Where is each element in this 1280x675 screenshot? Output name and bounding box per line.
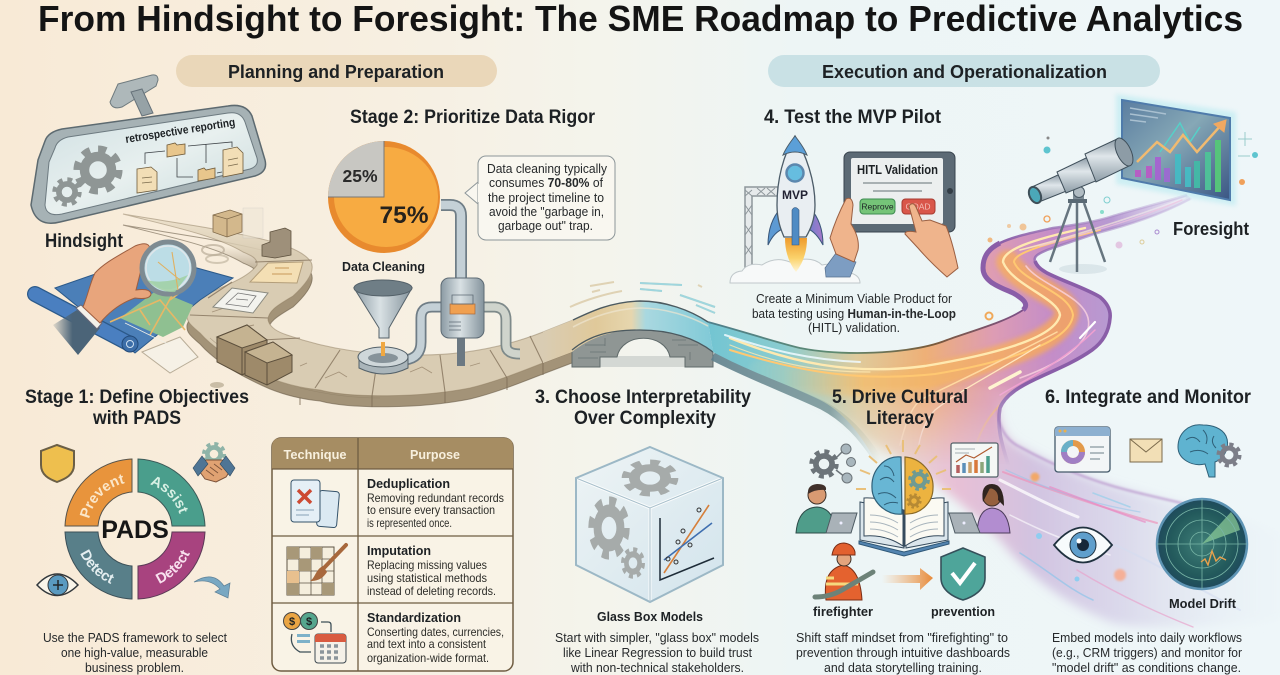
bridge deck <box>543 301 713 363</box>
gantry <box>745 187 778 270</box>
tripod <box>1059 264 1107 274</box>
caption: monitor <box>1052 631 1242 675</box>
basin <box>359 357 408 374</box>
row: deduplication: is represented once. <box>367 516 452 530</box>
icon: tablet HITL validation: Reprove <box>861 202 894 212</box>
caption: MVP: Create a Minimum Viable Product for <box>756 292 952 306</box>
row: deduplication: Deduplication <box>367 476 450 491</box>
caption: monitor: (e.g., CRM triggers) and monitor for <box>1052 646 1242 660</box>
icon: eye left <box>37 574 78 596</box>
icon: blueprint map <box>35 255 233 373</box>
row: standardization: Standardization <box>367 610 461 625</box>
icon: rear-view mirror <box>31 75 266 223</box>
caption: culture: and data storytelling training. <box>824 661 982 675</box>
row: standardization: and text into a consistent <box>367 637 487 651</box>
callout: avoid the "garbage in, <box>489 205 604 219</box>
road objects <box>202 208 303 385</box>
section pill: planning <box>176 55 497 87</box>
brain <box>872 457 902 514</box>
rope coil <box>202 245 224 255</box>
small crates <box>213 210 242 237</box>
icon: tablet HITL validation: HITL Validation <box>857 163 938 177</box>
icon: prevention shield <box>941 548 985 600</box>
caption: MVP: (HITL) validation. <box>808 321 900 335</box>
heading: stage 2: Stage 2: Prioritize Data Rigor <box>350 106 595 128</box>
icon: analytics screen <box>1116 94 1236 206</box>
pads wheel: PADS <box>101 516 169 544</box>
cylinder <box>441 278 484 338</box>
callout: consumes 70-80% of <box>489 176 603 190</box>
hand <box>83 244 151 323</box>
funnel <box>354 288 412 338</box>
icon: rocket launch: MVP <box>782 188 808 202</box>
icon: brain with gear <box>1178 425 1240 477</box>
label: firefighter: firefighter <box>813 604 873 619</box>
table header <box>272 438 513 469</box>
mirror gears <box>77 149 119 191</box>
book <box>859 541 949 556</box>
glass box chart <box>660 505 714 580</box>
table: cleaning techniques <box>272 438 513 671</box>
label: data cleaning: Data Cleaning <box>342 259 425 274</box>
segment: prevent <box>65 459 132 526</box>
maze paper <box>213 288 268 313</box>
caption: glass box: with non-technical stakeholders. <box>570 661 744 675</box>
magnifier <box>142 242 194 294</box>
left hand <box>825 253 856 277</box>
caption: monitor: Embed models into daily workflows <box>1052 631 1242 645</box>
person left <box>796 484 857 533</box>
row: standardization: Conserting dates, currencies, <box>367 625 504 639</box>
callout <box>465 156 615 240</box>
heading: step 6: 6. Integrate and Monitor <box>1045 386 1251 408</box>
pads wheel: Assist <box>150 476 188 514</box>
row: deduplication: Removing redundant records <box>367 491 504 505</box>
gear network <box>811 451 837 477</box>
fins <box>768 208 783 245</box>
icon: tablet HITL validation: GOAD <box>905 202 931 212</box>
glass box gears <box>626 462 674 494</box>
label: glass box models: Glass Box Models <box>597 609 703 624</box>
heading: stage 1 <box>25 386 249 429</box>
row: standardization: $ <box>306 616 312 628</box>
mirror workflow <box>137 142 243 193</box>
heading: step 3: Over Complexity <box>574 407 716 429</box>
row: imputation <box>287 543 496 598</box>
heading: step 5: 5. Drive Cultural <box>832 386 968 408</box>
chart card <box>951 443 998 477</box>
caption: MVP <box>752 292 956 335</box>
icon: telescope <box>1026 135 1137 274</box>
row: standardization <box>284 610 504 665</box>
heading: step 5 <box>832 386 968 429</box>
caption: pads: Use the PADS framework to select <box>43 631 227 645</box>
label: Hindsight: Hindsight <box>45 231 124 252</box>
icon: glass box <box>576 447 723 602</box>
tube <box>1032 174 1069 202</box>
paper sheet <box>142 337 198 373</box>
ribbon body <box>708 195 1192 470</box>
table: cleaning techniques: Technique <box>284 447 346 462</box>
icon: rocket launch <box>730 136 860 283</box>
table: cleaning techniques: Purpose <box>410 447 460 462</box>
icon: radar <box>1157 499 1247 589</box>
section pill: planning: Planning and Preparation <box>228 62 444 82</box>
right hand <box>905 204 958 277</box>
road surface <box>123 214 573 396</box>
screen bars <box>1135 140 1221 192</box>
mirror label: retrospective reporting <box>125 117 236 146</box>
ribbon edges <box>708 310 1023 353</box>
pads wheel: Prevent <box>80 474 125 518</box>
person right <box>949 484 1010 533</box>
arrow: firefighting to prevention <box>882 568 933 590</box>
callout: garbage out" trap. <box>498 219 593 233</box>
icon: learning illustration <box>796 440 1010 556</box>
icon: firefighter <box>815 543 873 600</box>
label: model drift: Model Drift <box>1169 596 1237 611</box>
road side wall <box>123 225 573 407</box>
caption: culture <box>796 631 1010 675</box>
heading: step 3 <box>535 386 751 429</box>
pads wheel: Detect <box>155 550 190 584</box>
stone road <box>123 214 573 407</box>
bridge shadow <box>600 356 685 367</box>
caption: glass box <box>555 631 759 675</box>
segment: assist <box>138 459 205 526</box>
caption: pads <box>43 631 227 675</box>
callout: the project timeline to <box>488 191 604 205</box>
heading: stage 1: Stage 1: Define Objectives <box>25 386 249 408</box>
flame <box>785 238 807 272</box>
section pill: execution: Execution and Operationalization <box>822 62 1107 82</box>
ribbon colour bands <box>725 198 1185 465</box>
icon: tablet HITL validation <box>825 152 958 277</box>
row: deduplication <box>291 476 504 530</box>
pipes <box>441 205 461 278</box>
segment: detect right <box>138 532 205 599</box>
row: standardization: organization-wide format. <box>367 651 489 665</box>
pie chart: data cleaning: 25% <box>342 166 378 186</box>
caption: MVP: bata testing using Human-in-the-Loop <box>752 307 956 321</box>
rainbow road <box>708 195 1192 470</box>
speed lines <box>570 282 715 313</box>
caption: glass box: like Linear Regression to build trust <box>563 646 752 660</box>
icon: shield <box>41 445 74 482</box>
pipeline <box>354 205 520 374</box>
heading: step 5: Literacy <box>866 407 934 429</box>
sleeve <box>53 310 100 355</box>
icon: eye right <box>1054 528 1112 562</box>
callout: Data cleaning typically <box>487 162 608 176</box>
row: standardization: $ <box>289 616 295 628</box>
icon: handshake <box>193 444 235 482</box>
ribbon lower wall <box>713 356 878 460</box>
row: imputation: using statistical methods <box>367 571 487 585</box>
heading: step 4: 4. Test the MVP Pilot <box>764 106 941 128</box>
icon: hand and magnifier <box>53 242 194 355</box>
body <box>777 136 815 237</box>
caption: pads: business problem. <box>85 661 184 675</box>
heading: step 3: 3. Choose Interpretability <box>535 386 751 408</box>
pads wheel: Detect <box>80 549 114 584</box>
stone blocks <box>217 325 267 375</box>
particles <box>986 132 1258 320</box>
pie chart: data cleaning <box>328 141 440 253</box>
caption: monitor: "model drift" as conditions change. <box>1052 661 1241 675</box>
label: Foresight: Foresight <box>1173 218 1249 239</box>
road map paper <box>250 262 303 283</box>
icon: dashboard window <box>1055 427 1110 472</box>
segment: detect left <box>65 532 132 599</box>
caption: culture: Shift staff mindset from "firefighting" to <box>796 631 1008 645</box>
pads wheel <box>64 458 206 600</box>
pie chart: data cleaning: 75% <box>379 202 429 229</box>
bridge stones <box>572 330 713 367</box>
label: prevention: prevention <box>931 604 995 619</box>
row: imputation: Replacing missing values <box>367 558 487 572</box>
exhaust clouds <box>730 259 860 283</box>
caption: culture: prevention through intuitive dashboards <box>796 646 1010 660</box>
row: imputation: instead of deleting records. <box>367 584 496 598</box>
bridge <box>543 282 715 367</box>
caption: pads: one high-value, measurable <box>61 646 208 660</box>
heading: stage 1: with PADS <box>92 407 181 429</box>
row: imputation: Imputation <box>367 543 431 558</box>
icon: curved arrow <box>194 577 230 598</box>
idea rays <box>856 440 951 489</box>
icon: envelope <box>1130 439 1162 462</box>
section pill: execution <box>768 55 1160 87</box>
row: deduplication: to ensure every transaction <box>367 503 495 517</box>
caption: glass box: Start with simpler, "glass box" models <box>555 631 759 645</box>
lower light swoosh <box>790 385 1280 627</box>
